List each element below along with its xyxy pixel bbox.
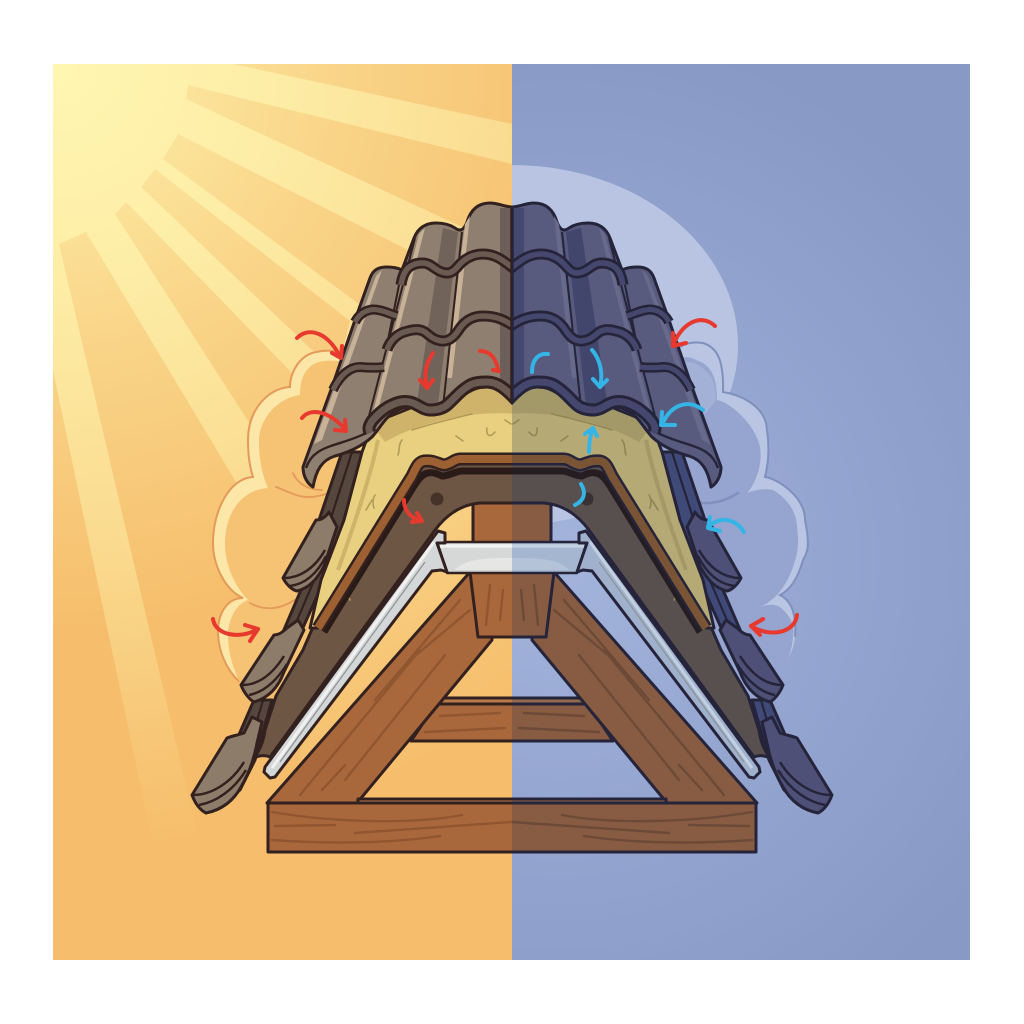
- king post lower: [470, 572, 518, 637]
- arrow: cold 4: [661, 404, 703, 425]
- cloud: cold air: [650, 342, 808, 664]
- background: warm half: [53, 64, 512, 960]
- tile row bands: [333, 254, 518, 433]
- arrow: cold 2: [592, 350, 607, 387]
- arrow: heat 6: [213, 619, 258, 641]
- verge tile 2: [283, 512, 337, 591]
- tile dividers: [368, 232, 462, 420]
- arrow: heat 7: [673, 320, 715, 346]
- cloud: warm air: [213, 351, 350, 686]
- arrow: heat 3: [420, 353, 433, 388]
- lower verge strip: [228, 700, 272, 790]
- insulation: [310, 378, 518, 628]
- arrow: cold 5: [575, 484, 584, 505]
- roof section: left half (warm colouring): [192, 203, 518, 852]
- verge tile 3: [241, 620, 304, 702]
- arrow: heat 4: [480, 351, 499, 371]
- king post upper: [473, 500, 518, 550]
- metal bracket: [264, 531, 447, 778]
- rafter: [267, 572, 492, 803]
- roof deck: [254, 462, 518, 758]
- arrow: cold 1: [532, 354, 548, 372]
- arrow: heat 1: [297, 332, 342, 358]
- bottom beam: [268, 799, 518, 852]
- arrow: cold 6: [708, 517, 744, 532]
- cold halo: [512, 165, 738, 522]
- main roof tiles: [303, 203, 518, 487]
- crossbar: [411, 698, 518, 741]
- metal tray: [437, 542, 518, 573]
- roof section: right half (cold colouring): [506, 203, 832, 852]
- side eave line: [306, 432, 368, 468]
- arrow: heat 8: [751, 615, 797, 635]
- arrow: cold 3: [585, 428, 597, 452]
- ridge line: [510, 207, 514, 403]
- sarking band: [318, 459, 518, 632]
- tile field: [303, 203, 518, 487]
- bolt: [430, 492, 444, 506]
- darker wedges between the sun rays: [53, 64, 512, 960]
- background: cold half: [512, 64, 970, 960]
- verge tile 4: [192, 717, 262, 813]
- heat flow arrows: [213, 320, 797, 641]
- arrow: heat 5: [404, 500, 422, 522]
- tile shading stripes: [314, 208, 512, 444]
- upper verge strip: [283, 452, 362, 632]
- arrow: heat 2: [302, 412, 346, 431]
